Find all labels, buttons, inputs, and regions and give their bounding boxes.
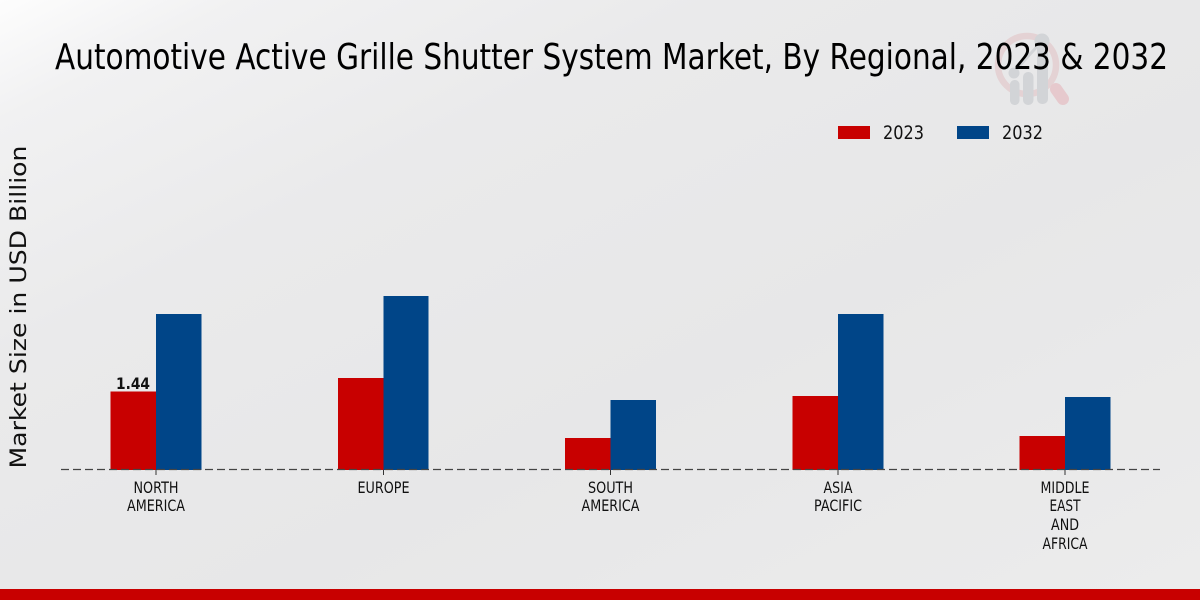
bars: North America [110,314,202,470]
x axis label: Middle East and Africa: EAST [1050,496,1081,515]
footer bar [0,589,1200,600]
data label: 1.44: 1.44 [116,374,150,393]
x axis label: Middle East and Africa: MIDDLE [1040,478,1090,497]
x axis label: South America: SOUTH [588,478,633,497]
x axis label: Europe: EUROPE [358,478,410,497]
bars: Middle East and Africa [1020,397,1110,470]
legend item: 2023: 2023 [883,122,924,144]
bar chart [61,296,1160,475]
x axis label: Asia Pacific: PACIFIC [814,496,862,515]
y axis label: Market Size in USD Billion [6,146,32,468]
bars: Europe [338,296,428,470]
x axis label: North America: NORTH [134,478,178,497]
x axis label: North America: AMERICA [127,496,185,515]
icon: watermark magnifier with bars [998,34,1063,105]
legend item: 2032 [957,122,1043,144]
x axis label: South America: AMERICA [582,496,640,515]
x axis label: Asia Pacific: ASIA [824,478,853,497]
x axis label: Asia Pacific [814,478,862,515]
x axis label: Middle East and Africa: AND [1051,515,1079,534]
x axis label: Middle East and Africa [1040,478,1090,553]
x axis label: North America [127,478,185,515]
legend item: 2023 [838,122,924,144]
bars: South America [565,400,656,470]
legend item: 2032: 2032 [1002,122,1043,144]
x axis label: South America [582,478,640,515]
legend [838,122,1043,144]
x axis label: Middle East and Africa: AFRICA [1042,534,1088,553]
bars: Asia Pacific [792,314,884,470]
